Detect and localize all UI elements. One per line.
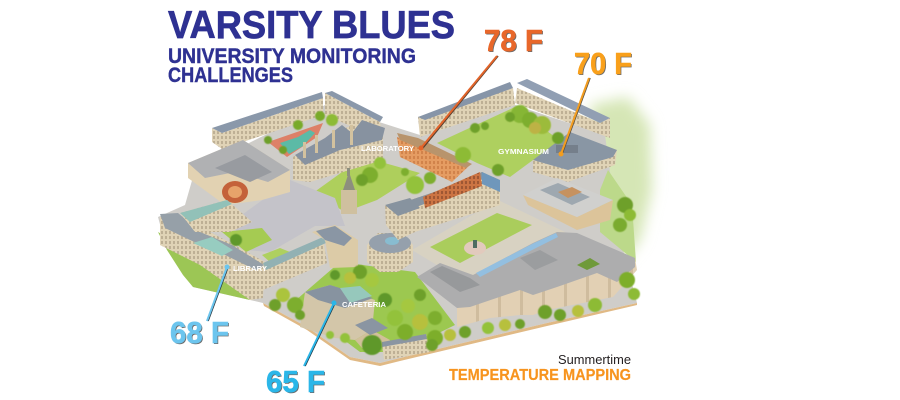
building labels: LABORATORY	[361, 144, 414, 153]
small block by rotunda	[385, 198, 420, 240]
caption	[449, 352, 631, 384]
caption: TEMPERATURE MAPPING	[449, 367, 631, 384]
clock tower	[341, 168, 357, 214]
plaza in front of library	[232, 180, 345, 252]
rotunda	[367, 233, 413, 272]
small library lawns	[222, 228, 290, 262]
lower plaza and lawn	[412, 200, 565, 285]
library wing	[160, 200, 327, 300]
round-ended hall	[312, 225, 358, 268]
north wing blocks	[418, 79, 610, 138]
callout: library 68 F: 68 F	[171, 316, 230, 351]
building labels: CAFETERIA	[342, 300, 387, 309]
gothic hall	[293, 120, 385, 182]
building labels	[233, 144, 549, 309]
callout: gymnasium 70 F: 70 F	[574, 46, 632, 81]
science block with cutaway	[387, 172, 500, 236]
trees	[230, 105, 640, 355]
building labels: GYMNASIUM	[498, 147, 549, 156]
callout: gymnasium 70 F: 70 F	[575, 47, 633, 82]
upper quad lawn	[437, 107, 563, 177]
subtitle: UNIVERSITY MONITORING	[168, 44, 416, 68]
large low-rise complex	[417, 232, 637, 327]
tennis courts	[268, 123, 323, 157]
callout: laboratory 78 F: 78 F	[484, 23, 543, 58]
cafeteria	[300, 285, 390, 348]
central quad lawn	[313, 157, 420, 212]
callout: laboratory 78 F	[418, 23, 544, 150]
soft green ground on the right	[590, 97, 652, 262]
building labels: LIBRARY	[233, 264, 267, 273]
subtitle: CHALLENGES	[168, 63, 293, 87]
south lodge	[382, 334, 430, 360]
laboratory	[397, 133, 472, 182]
campus ground	[158, 105, 637, 366]
subtitle	[168, 44, 416, 87]
domed hall	[188, 140, 290, 205]
callout: library 68 F	[170, 264, 230, 351]
callout: library 68 F: 68 F	[170, 315, 229, 350]
title: VARSITY BLUES	[168, 4, 455, 47]
callout: cafeteria 65 F: 65 F	[267, 365, 326, 400]
callout: laboratory 78 F: 78 F	[485, 24, 544, 59]
caption: Summertime	[558, 352, 631, 367]
callout: cafeteria 65 F	[266, 300, 336, 400]
gymnasium	[533, 132, 617, 182]
callout: cafeteria 65 F: 65 F	[266, 364, 325, 399]
flat-roof block	[523, 178, 613, 230]
building: north-west wing	[212, 91, 383, 149]
callout: gymnasium 70 F	[558, 46, 633, 156]
campus map illustration	[158, 79, 652, 366]
